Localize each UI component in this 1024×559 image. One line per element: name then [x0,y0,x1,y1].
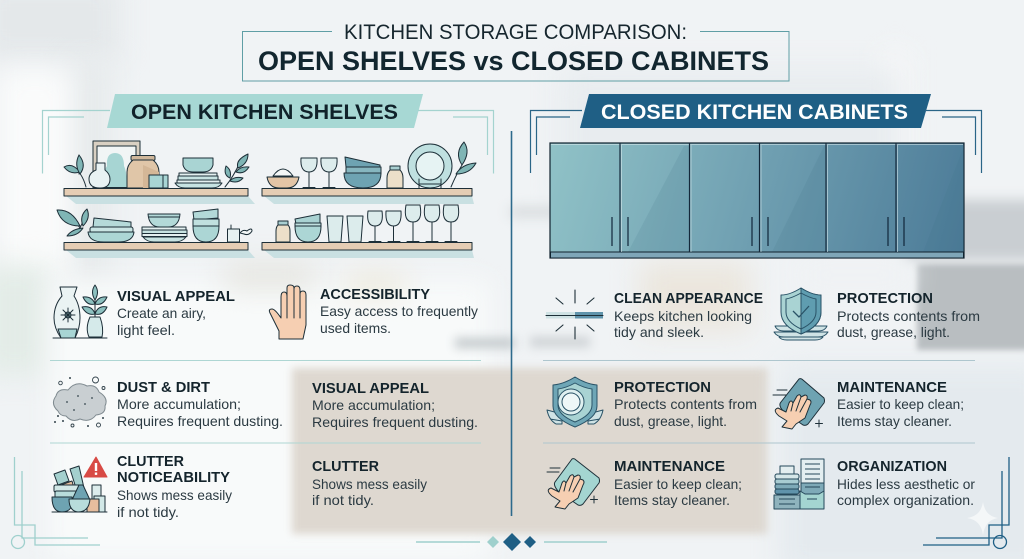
title frame [242,32,789,81]
text: maintenance right: Easier to keep clean; [837,396,964,412]
cabinet top and door edge highlights [551,144,963,252]
cabinet door seams [620,143,896,252]
item: clutter: CLUTTER [312,458,379,475]
text: visual appeal: VISUAL APPEAL [117,288,235,305]
item: clutter: Shows mess easily [312,476,427,492]
bottom left corner ornament [12,457,100,548]
text: clutter noticeability: if not tidy. [117,504,179,520]
text: accessibility: used items. [320,320,391,336]
text: accessibility [320,286,478,336]
item: maintenance left [547,458,742,509]
text: dust and dirt: Requires frequent dusting. [117,413,283,429]
door reflections [628,146,964,252]
text: maintenance right [837,379,964,429]
text: protection middle: PROTECTION [614,379,711,396]
item: visual appeal second: More accumulation; [312,397,435,413]
text: dust and dirt: DUST & DIRT [117,379,210,396]
item: protection top [774,288,980,340]
text: maintenance left: Easier to keep clean; [614,476,742,492]
icon: hand wiping with teal cloth [547,459,600,509]
row dividers [50,360,975,443]
text: maintenance left: Items stay cleaner. [614,492,730,508]
text: protection top: Protects contents from [837,308,980,324]
cabinet handles [612,217,904,246]
text: protection middle: dust, grease, light. [614,413,727,429]
title line two: OPEN SHELVES vs CLOSED CABINETS [258,46,769,76]
item: dust and dirt [53,377,283,429]
icon: stacked files and trays [774,459,824,509]
left column header banner: OPEN KITCHEN SHELVES [131,101,398,124]
text: clean appearance: CLEAN APPEARANCE [614,290,763,307]
item: visual appeal second: VISUAL APPEAL [312,380,429,397]
icon: cluttered dishes with warning [52,457,107,512]
icon: hand wiping with blue cloth [773,379,824,429]
item: clutter [312,458,427,508]
item: clean appearance [546,290,763,340]
text: maintenance left: MAINTENANCE [614,458,725,475]
text: clean appearance: tidy and sleek. [614,324,704,340]
text: clutter noticeability [117,453,232,520]
sparkle mark [967,502,998,535]
text: accessibility: ACCESSIBILITY [320,286,430,303]
text: dust and dirt: More accumulation; [117,396,241,412]
icon: hand [269,285,306,339]
shelf four items [276,205,459,242]
text: protection top: dust, grease, light. [837,324,950,340]
text: protection middle: Protects contents from [614,396,757,412]
text: maintenance left [614,458,742,508]
open shelves illustration [57,141,476,258]
text: maintenance right: Items stay cleaner. [837,413,952,429]
shelf one items [64,141,249,188]
left column header banner [107,94,423,128]
text: organization: complex organization. [837,492,974,508]
item: accessibility [269,285,478,339]
text: clutter noticeability: Shows mess easily [117,487,232,503]
item: clutter: if not tidy. [312,492,374,508]
right column header banner [580,94,931,128]
icon: shield with check [774,288,828,340]
text: visual appeal: Create an airy, [117,305,206,321]
left column brackets [42,110,494,174]
title line one: KITCHEN STORAGE COMPARISON: [344,21,687,44]
text: clean appearance [614,290,763,340]
text: maintenance right: MAINTENANCE [837,379,947,396]
text: clutter noticeability: CLUTTER [117,453,184,470]
icon: dust cloud [53,377,106,427]
bottom center ornament [416,533,607,551]
item: visual appeal second: Requires frequent dusting. [312,414,478,430]
icon: shield with plate [547,377,603,427]
item: protection middle [547,377,757,429]
item: clutter noticeability [52,453,232,520]
text: protection top [837,290,980,340]
text: clutter noticeability: NOTICEABILITY [117,469,230,486]
item: visual appeal second [312,380,478,430]
right column brackets [530,110,982,173]
shelf boards with shadows [64,188,474,258]
text: organization: ORGANIZATION [837,458,947,475]
shelf two items [267,142,476,188]
text: organization [837,458,975,508]
item: maintenance right [773,379,964,429]
text: dust and dirt [117,379,283,429]
item: organization [774,458,975,509]
text: visual appeal: light feel. [117,322,175,338]
text: clean appearance: Keeps kitchen looking [614,308,752,324]
item: visual appeal [53,285,235,338]
right column header banner: CLOSED KITCHEN CABINETS [601,101,908,124]
text: accessibility: Easy access to frequently [320,303,478,319]
text: protection middle [614,379,757,429]
bottom right corner ornament [923,457,1009,548]
shelf three items [57,209,252,242]
text: protection top: PROTECTION [837,290,933,307]
icon: vase and plant [53,285,107,338]
icon: clean sparkle bar [546,290,603,339]
closed cabinets illustration [550,143,964,258]
text: visual appeal [117,288,235,338]
center divider [510,131,512,516]
text: organization: Hides less aesthetic or [837,476,975,492]
